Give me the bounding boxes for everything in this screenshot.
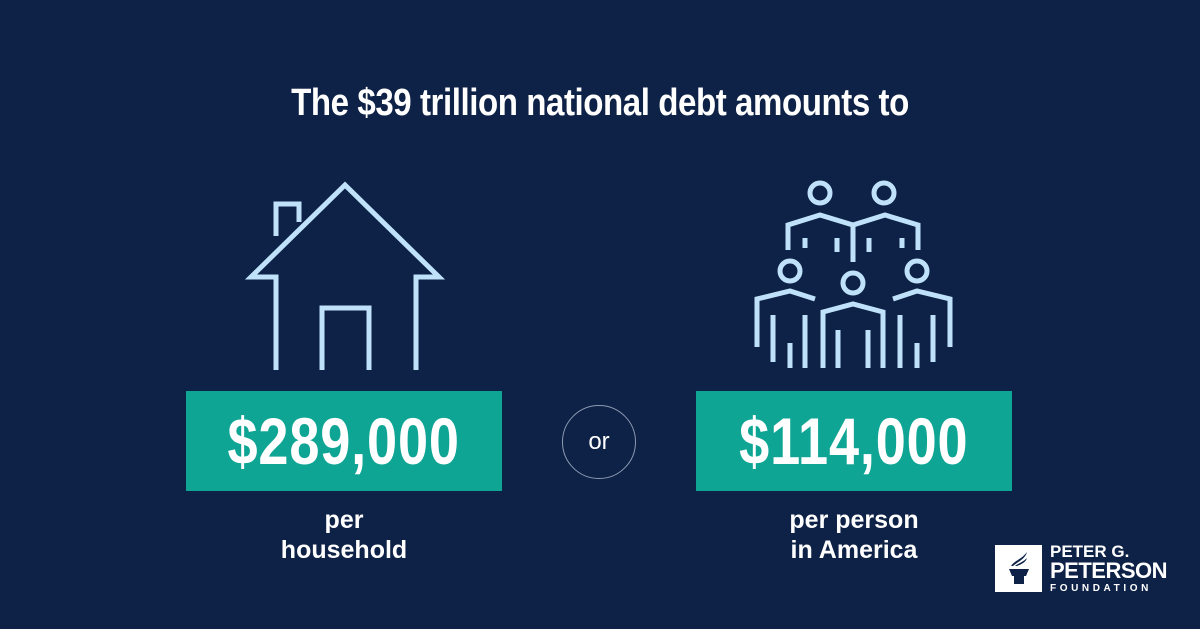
logo text: PETERSON: [1050, 558, 1167, 583]
logo text: FOUNDATION: [1050, 583, 1152, 594]
label: per household: household: [281, 536, 407, 564]
or circle: [562, 405, 636, 479]
logo text: PETER G.: [1050, 542, 1129, 561]
value box: household: $289,000: [228, 404, 460, 478]
title: The $39 trillion national debt amounts to: [291, 82, 909, 124]
label: per person: [789, 506, 919, 564]
label: per household: [281, 506, 407, 564]
label: per person: in America: [791, 536, 917, 564]
value box: person: $114,000: [739, 404, 969, 478]
label: per person: per person: [789, 506, 919, 534]
value box: person: [696, 391, 1012, 491]
logo text: [1050, 542, 1167, 594]
logo icon: [995, 545, 1042, 592]
or circle: or: [588, 428, 610, 455]
label: per household: per: [325, 506, 363, 534]
value box: household: [186, 391, 502, 491]
logo: [995, 542, 1167, 594]
